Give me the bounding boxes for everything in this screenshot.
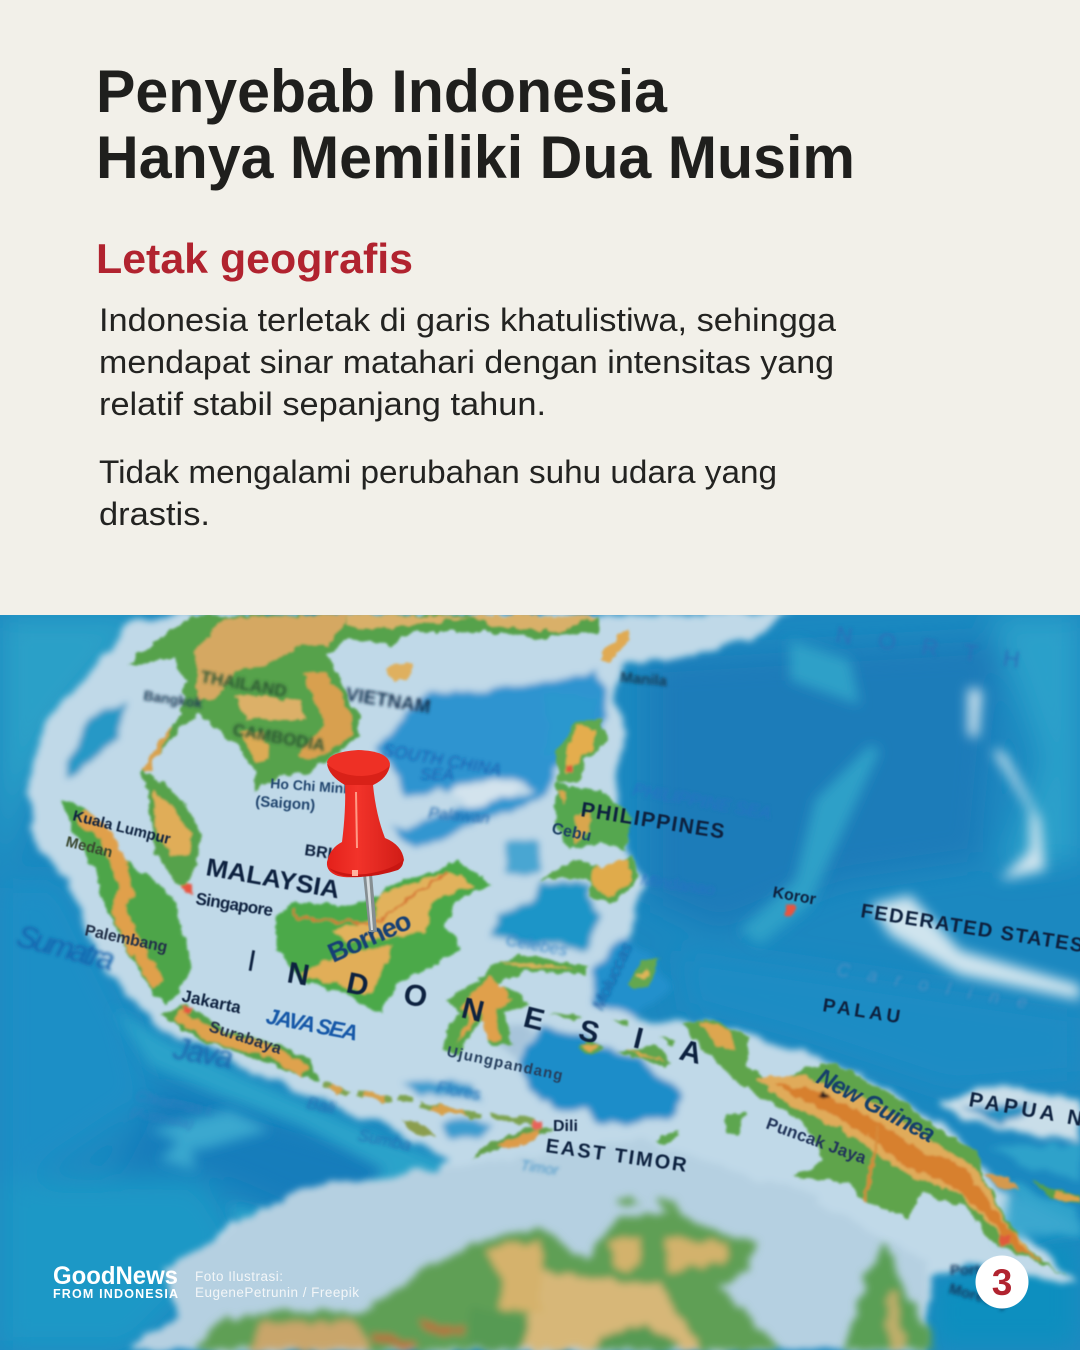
map labels: S	[575, 1014, 603, 1051]
cities	[182, 885, 795, 1014]
blurred map labels: Palawan	[428, 805, 490, 827]
body text paragraph 1: mendapat sinar matahari dengan intensitas yang	[99, 344, 834, 380]
map labels: Medan	[64, 833, 114, 861]
Cape York	[843, 1240, 937, 1350]
coastal teal bands	[123, 1017, 442, 1220]
Huon and New Britain	[985, 1172, 1018, 1190]
map labels: PHILIPPINES	[579, 798, 726, 844]
blurred map labels: NORTH	[834, 621, 1047, 676]
Australia north coast	[197, 1213, 781, 1350]
page number badge: 3	[992, 1262, 1012, 1303]
blurred map labels: Timor	[519, 1157, 561, 1179]
New Guinea	[681, 1020, 1068, 1277]
map labels: (Saigon)	[255, 793, 316, 814]
map labels: Dili	[553, 1118, 578, 1135]
body text paragraph 2: Tidak mengalami perubahan suhu udara yang	[99, 454, 777, 490]
blurred map labels: THAILAND	[199, 667, 288, 701]
blurred map labels: (Australia)	[129, 1103, 195, 1132]
map labels	[64, 775, 1080, 1177]
blurred map labels: SOUTH CHINA	[381, 740, 503, 780]
blurred map labels: Java	[170, 1030, 236, 1075]
blurred map labels: Manila	[620, 669, 668, 690]
map labels: Jakarta	[180, 986, 243, 1017]
map labels: Puncak Jaya	[764, 1114, 869, 1168]
map labels: N	[458, 992, 487, 1029]
map labels: E	[520, 1001, 548, 1038]
map photograph of Indonesia	[0, 615, 1080, 1350]
blurred map labels: CAMBODIA	[231, 720, 327, 755]
footer logo: GoodNews from Indonesia: GoodNews	[53, 1262, 178, 1290]
map labels: New Guinea	[812, 1063, 940, 1148]
footer logo: GoodNews from Indonesia	[53, 1262, 178, 1301]
blurred map labels: Moluccas	[589, 939, 637, 1013]
blurred map labels: VIETNAM	[344, 684, 432, 718]
blurred map labels: Moresby	[947, 1280, 1012, 1313]
photo credit: Foto Ilustrasi:	[195, 1269, 283, 1284]
map labels: EAST TIMOR	[544, 1135, 689, 1177]
title: Penyebab Indonesia	[96, 58, 668, 125]
blurred map labels	[13, 621, 1047, 1313]
blurred map labels: Bali	[305, 1093, 338, 1118]
map labels: FEDERATED STATES	[859, 900, 1080, 957]
map labels: JAVA SEA	[264, 1003, 360, 1046]
Lesser Sunda islands	[325, 1085, 535, 1122]
blurred map labels: Celebes	[504, 930, 570, 960]
blurred map labels: Sumatra	[13, 918, 119, 978]
map labels: Koror	[771, 884, 817, 909]
blurred map labels: Sumba	[356, 1125, 413, 1155]
blurred map labels: Caroline	[835, 959, 1047, 1016]
map labels: D	[344, 967, 372, 1003]
blurred map labels: Mindanao	[639, 870, 716, 899]
heading: Letak geografis: Letak geografis	[96, 235, 413, 282]
pin needle	[363, 874, 377, 932]
pin body	[327, 785, 404, 877]
map labels: BRI	[303, 842, 333, 863]
push pin	[327, 750, 404, 932]
blurred map labels: Flores	[435, 1079, 482, 1104]
blurred map labels: PHILIPPINE SEA	[631, 779, 773, 823]
map labels: Cebu	[550, 820, 593, 845]
Indochina and Thailand landmass	[128, 615, 599, 887]
body text paragraph 2: drastis.	[99, 496, 210, 532]
map labels: Ujungpandang	[445, 1043, 564, 1084]
map labels: Singapore	[194, 889, 274, 920]
Sumatra	[62, 802, 193, 1005]
Sulawesi	[442, 955, 588, 1055]
Java	[160, 1003, 320, 1082]
pin highlight	[355, 792, 358, 848]
map labels: I	[630, 1022, 646, 1056]
map labels: MALAYSIA	[204, 853, 342, 904]
Borneo	[276, 862, 490, 1013]
blurred map labels: Bangkok	[143, 687, 204, 711]
map labels: Kuala Lumpur	[71, 807, 172, 848]
Philippines	[556, 718, 606, 785]
footer logo: GoodNews from Indonesia: FROM INDONESIA	[53, 1287, 178, 1301]
pin head	[327, 750, 390, 785]
Maluku and Halmahera islands	[628, 958, 658, 990]
map labels: Borneo	[323, 905, 416, 968]
map labels: Palembang	[83, 922, 169, 956]
page number badge	[976, 1256, 1028, 1308]
body text paragraph 1: relatif stabil sepanjang tahun.	[99, 386, 546, 422]
blurred map labels: SEA	[420, 765, 454, 784]
map labels: PALAU	[821, 995, 902, 1028]
body text paragraph 1: Indonesia terletak di garis khatulistiwa, sehingga	[99, 302, 836, 338]
title	[96, 58, 855, 191]
map labels: Ho Chi Minh	[270, 775, 352, 797]
blurred map labels: Christmas I.	[134, 1087, 216, 1121]
photo credit: EugenePetrunin / Freepik	[195, 1285, 359, 1300]
shallow shelf seas	[28, 615, 1080, 1350]
title: Hanya Memiliki Dua Musim	[96, 124, 855, 191]
map labels: N	[285, 956, 312, 993]
map labels: I	[245, 944, 259, 978]
map labels: O	[401, 978, 430, 1015]
map labels: A	[676, 1034, 705, 1071]
body text paragraph 1	[99, 302, 836, 422]
body text paragraph 2	[99, 454, 777, 532]
blurred map labels: Port	[950, 1262, 980, 1279]
map labels: Surabaya	[207, 1019, 283, 1058]
ocean ridges and reefs	[150, 640, 1080, 1240]
photo credit	[195, 1269, 359, 1300]
